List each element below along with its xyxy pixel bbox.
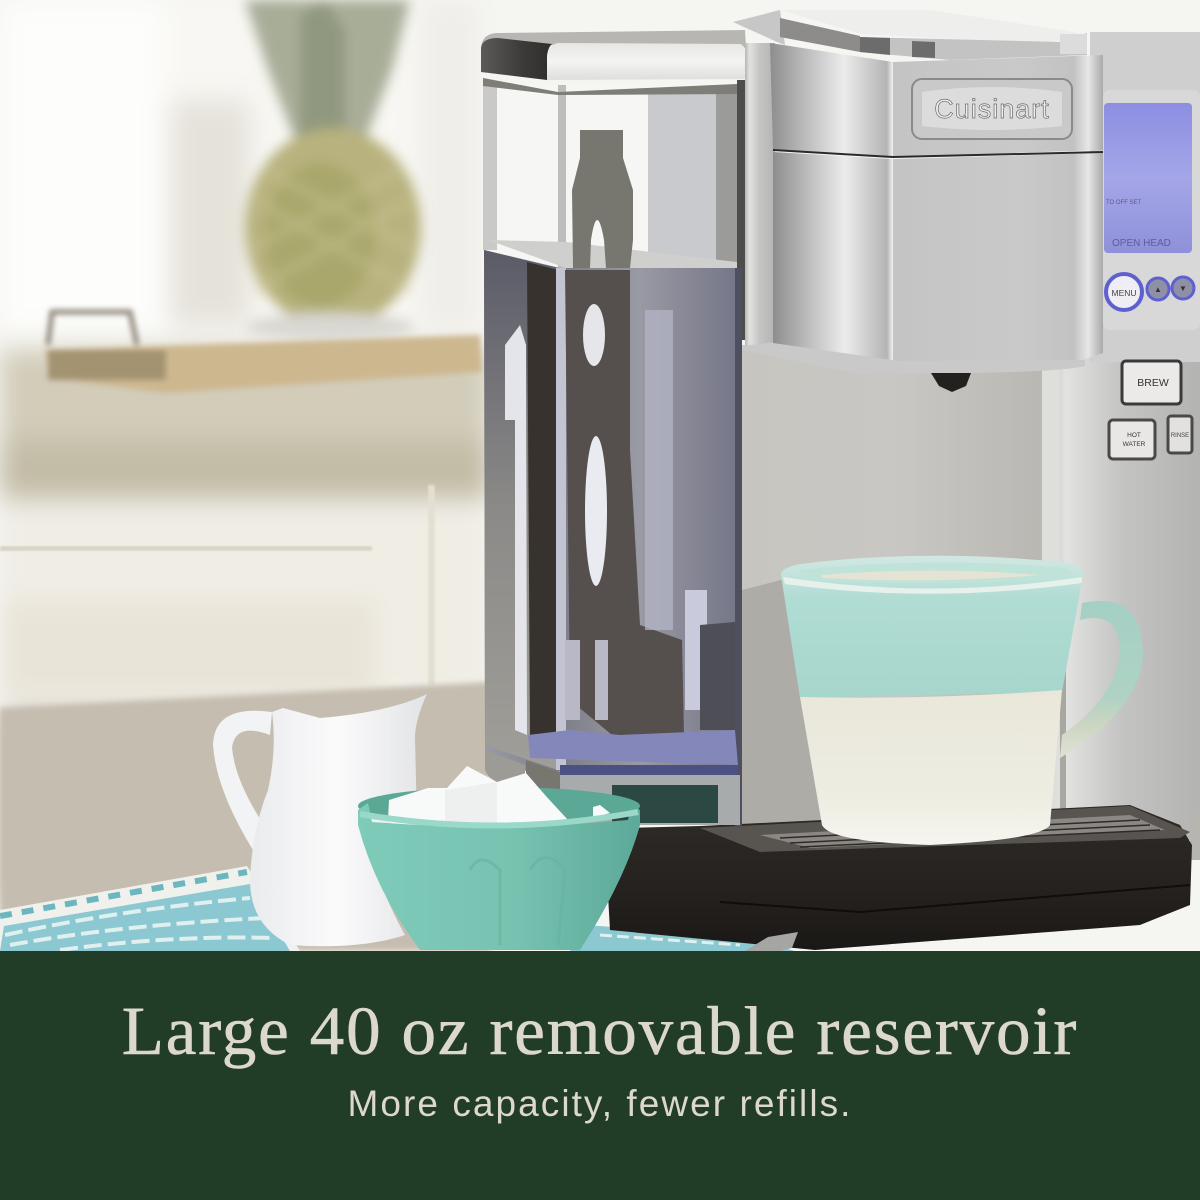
control panel xyxy=(1103,90,1200,459)
control panel: BREW xyxy=(1137,377,1169,389)
brew head xyxy=(733,10,1103,392)
mug xyxy=(781,556,1143,845)
control panel: ▲ xyxy=(1154,285,1162,294)
spout xyxy=(931,373,971,392)
control panel: HOT xyxy=(1127,432,1141,439)
drip tray xyxy=(608,805,1192,950)
upper housing xyxy=(770,43,893,157)
patterned napkin xyxy=(0,866,795,951)
coffee maker body xyxy=(742,32,1200,860)
control panel: ▼ xyxy=(1179,284,1187,293)
control panel: MENU xyxy=(1111,288,1137,298)
control panel: WATER xyxy=(1123,441,1146,448)
caption band xyxy=(0,951,1200,1200)
water reservoir xyxy=(483,78,745,828)
cutting board xyxy=(45,312,482,393)
spoon xyxy=(745,932,798,951)
control panel: TO OFF SET xyxy=(1106,200,1142,206)
water body xyxy=(484,250,742,775)
reservoir lid xyxy=(481,30,746,80)
sugar bowl xyxy=(358,766,640,950)
kitchen background xyxy=(0,0,1200,951)
logo badge xyxy=(912,79,1072,139)
reservoir clear upper section xyxy=(483,78,745,340)
subtitle: More capacity, fewer refills. xyxy=(348,1083,852,1124)
control panel: OPEN HEAD xyxy=(1112,238,1171,249)
creamer jug xyxy=(213,694,427,946)
title: Large 40 oz removable reservoir xyxy=(122,993,1078,1069)
top lid xyxy=(733,10,785,45)
control panel: RINSE xyxy=(1171,433,1189,439)
product photo xyxy=(0,0,1200,951)
lower housing xyxy=(773,152,893,360)
logo badge: Cuisinart xyxy=(934,94,1050,124)
pineapple xyxy=(245,0,421,341)
float stem xyxy=(572,130,633,268)
